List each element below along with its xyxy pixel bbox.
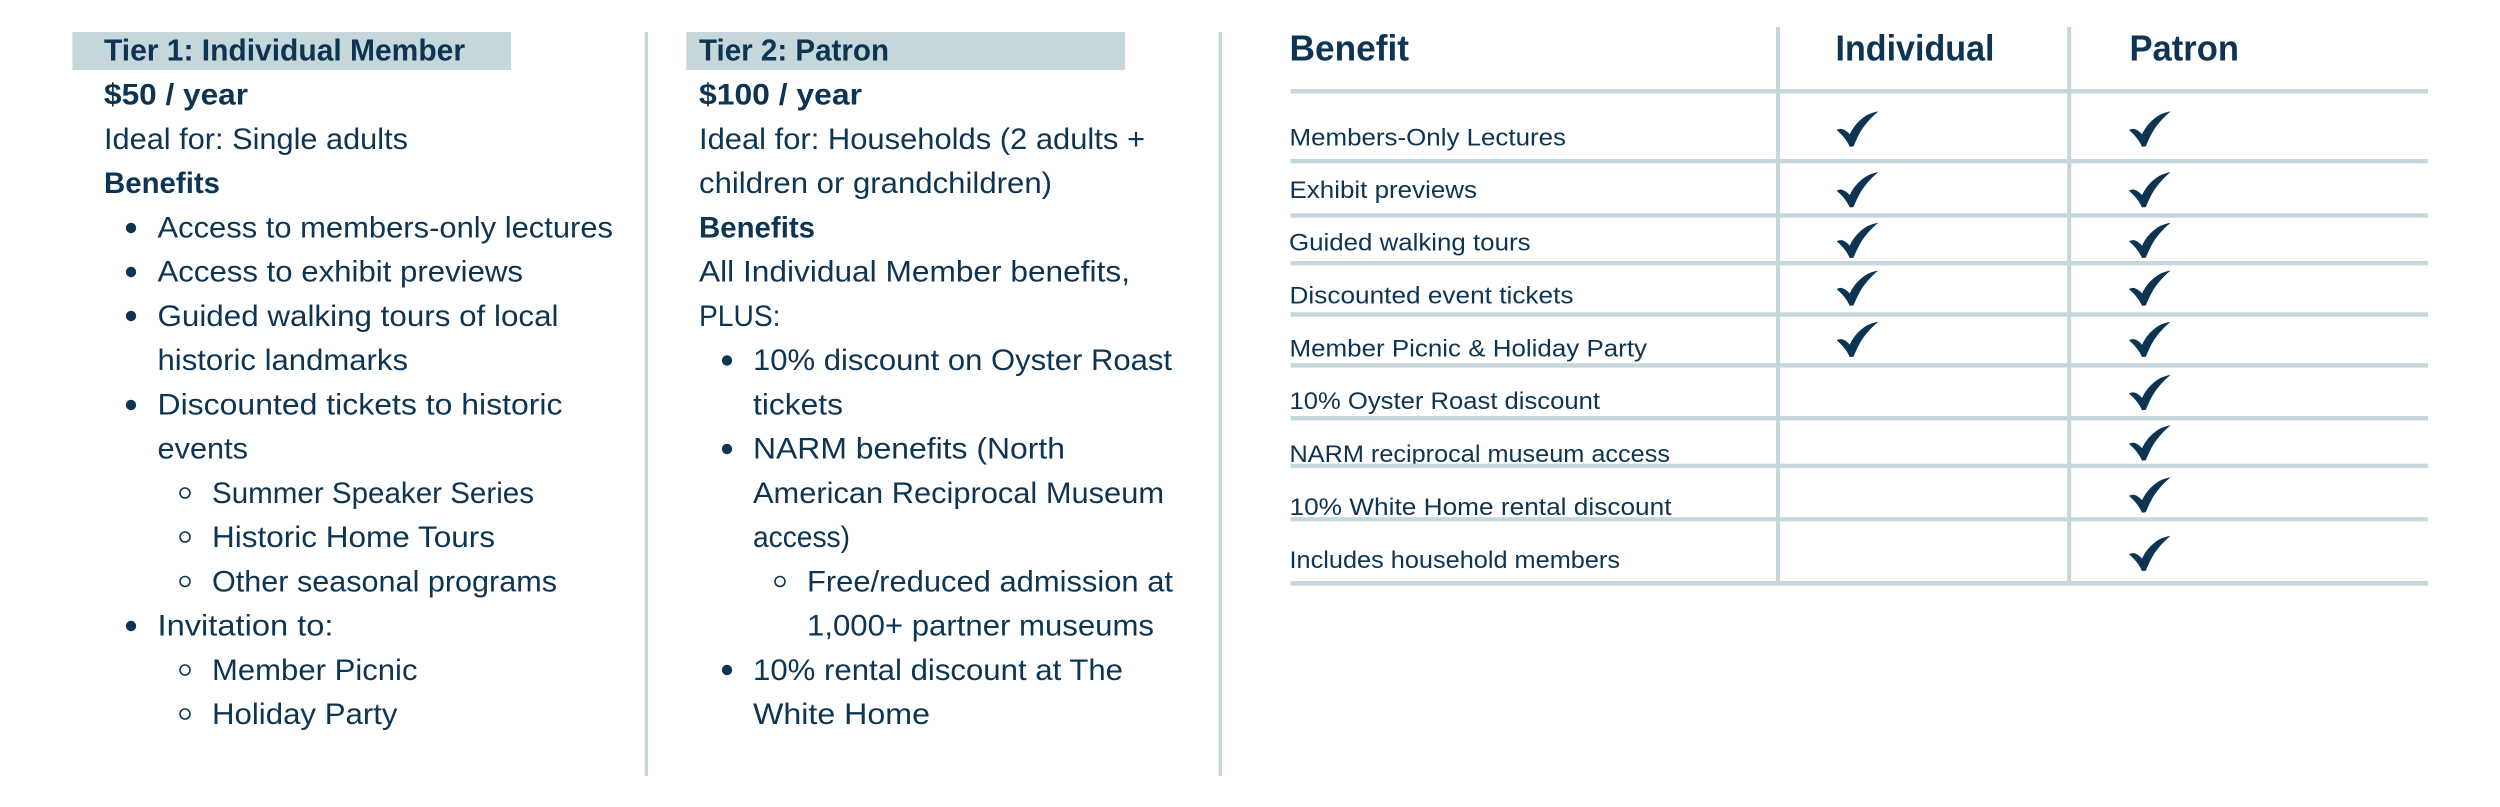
benefit list: Tier 2: 10% discount on Oyster Roast	[753, 344, 1173, 377]
row: Discounted event tickets: Discounted event tickets	[1290, 282, 1574, 310]
row: Member Picnic & Holiday Party: Member Picnic & Holiday Party	[1290, 336, 1648, 363]
benefit list: Tier 1: Summer Speaker Series	[212, 477, 534, 510]
panel: Tier 2 Patron	[686, 32, 1174, 731]
benefit list: Tier 1: Access to exhibit previews	[158, 256, 523, 289]
panel: Tier 1 Individual Member	[72, 32, 613, 731]
benefit list: Tier 2	[722, 344, 1174, 731]
row: Discounted event tickets	[1290, 270, 2171, 310]
row: Guided walking tours: Guided walking tours	[1289, 230, 1530, 257]
benefit list: Tier 2: tickets	[753, 388, 843, 422]
row: Members-Only Lectures: Members-Only Lectures	[1290, 125, 1566, 152]
price: Tier 2: $100 / year	[699, 79, 862, 112]
table header	[1290, 28, 2239, 69]
subheading: Tier 2 benefits: Benefits	[699, 212, 815, 244]
benefit list: Tier 1: Guided walking tours of local	[158, 300, 558, 333]
benefit list: Tier 1: Invitation to:	[158, 610, 334, 643]
benefit list: Tier 1: Member Picnic	[212, 654, 418, 687]
table header: Individual	[1836, 28, 1994, 69]
benefit list: Tier 1: historic landmarks	[158, 344, 408, 377]
row: Guided walking tours	[1289, 223, 2171, 258]
row: NARM reciprocal museum access: NARM reciprocal museum access	[1290, 441, 1670, 468]
row: Exhibit previews	[1290, 172, 2171, 207]
benefit list: Tier 2: 1,000+ partner museums	[807, 610, 1154, 643]
benefit list: Tier 1: Other seasonal programs	[212, 566, 557, 598]
row: 10% White Home rental discount	[1290, 477, 2171, 521]
table header: Patron	[2130, 28, 2239, 69]
benefit list: Tier 2: White Home	[753, 698, 930, 731]
benefit list: Tier 2: 10% rental discount at The	[753, 654, 1123, 687]
audience: Tier 2: children or grandchildren)	[699, 167, 1052, 200]
heading bar: Tier 2	[686, 32, 1125, 70]
row: 10% Oyster Roast discount	[1290, 375, 2171, 415]
audience: Tier 2	[699, 123, 1145, 200]
intro text: Tier 2 benefits	[699, 256, 1130, 333]
row: Includes household members: Includes household members	[1290, 547, 1620, 574]
row: NARM reciprocal museum access	[1290, 425, 2171, 468]
row: Includes household members	[1290, 536, 2171, 574]
benefit list: Tier 2: American Reciprocal Museum	[753, 477, 1164, 510]
benefit list: Tier 1: events	[158, 433, 248, 466]
row: Member Picnic & Holiday Party	[1290, 322, 2171, 363]
benefit list: Tier 1: Holiday Party	[212, 698, 398, 731]
intro text: Tier 2 benefits: All Individual Member benefits,	[699, 256, 1130, 289]
benefit list: Tier 2: NARM benefits (North	[753, 433, 1065, 466]
benefit list: Tier 2: access)	[753, 521, 850, 554]
intro text: Tier 2 benefits: PLUS:	[699, 300, 780, 333]
subheading: Tier 1 benefits: Benefits	[104, 167, 220, 200]
heading bar: Tier 1: Tier 1: Individual Member	[104, 32, 465, 68]
benefit list: Tier 2: Free/reduced admission at	[807, 566, 1174, 598]
row: 10% Oyster Roast discount: 10% Oyster Roast discount	[1290, 388, 1600, 415]
price: Tier 1: $50 / year	[104, 79, 248, 112]
table header: Benefit	[1290, 28, 1409, 69]
row: 10% White Home rental discount: 10% White Home rental discount	[1290, 494, 1672, 521]
heading bar: Tier 2: Tier 2: Patron	[699, 32, 889, 68]
row: Exhibit previews: Exhibit previews	[1290, 177, 1477, 204]
benefit list: Tier 1: Historic Home Tours	[212, 521, 495, 554]
comparison table	[1289, 27, 2428, 586]
audience: Tier 1: Ideal for: Single adults	[104, 123, 408, 156]
benefit list: Tier 1: Discounted tickets to historic	[158, 388, 562, 422]
benefit list: Tier 1	[126, 212, 613, 731]
row: Members-Only Lectures	[1290, 111, 2171, 152]
benefit list: Tier 1: Access to members-only lectures	[158, 212, 613, 244]
audience: Tier 2: Ideal for: Households (2 adults +	[699, 123, 1145, 156]
